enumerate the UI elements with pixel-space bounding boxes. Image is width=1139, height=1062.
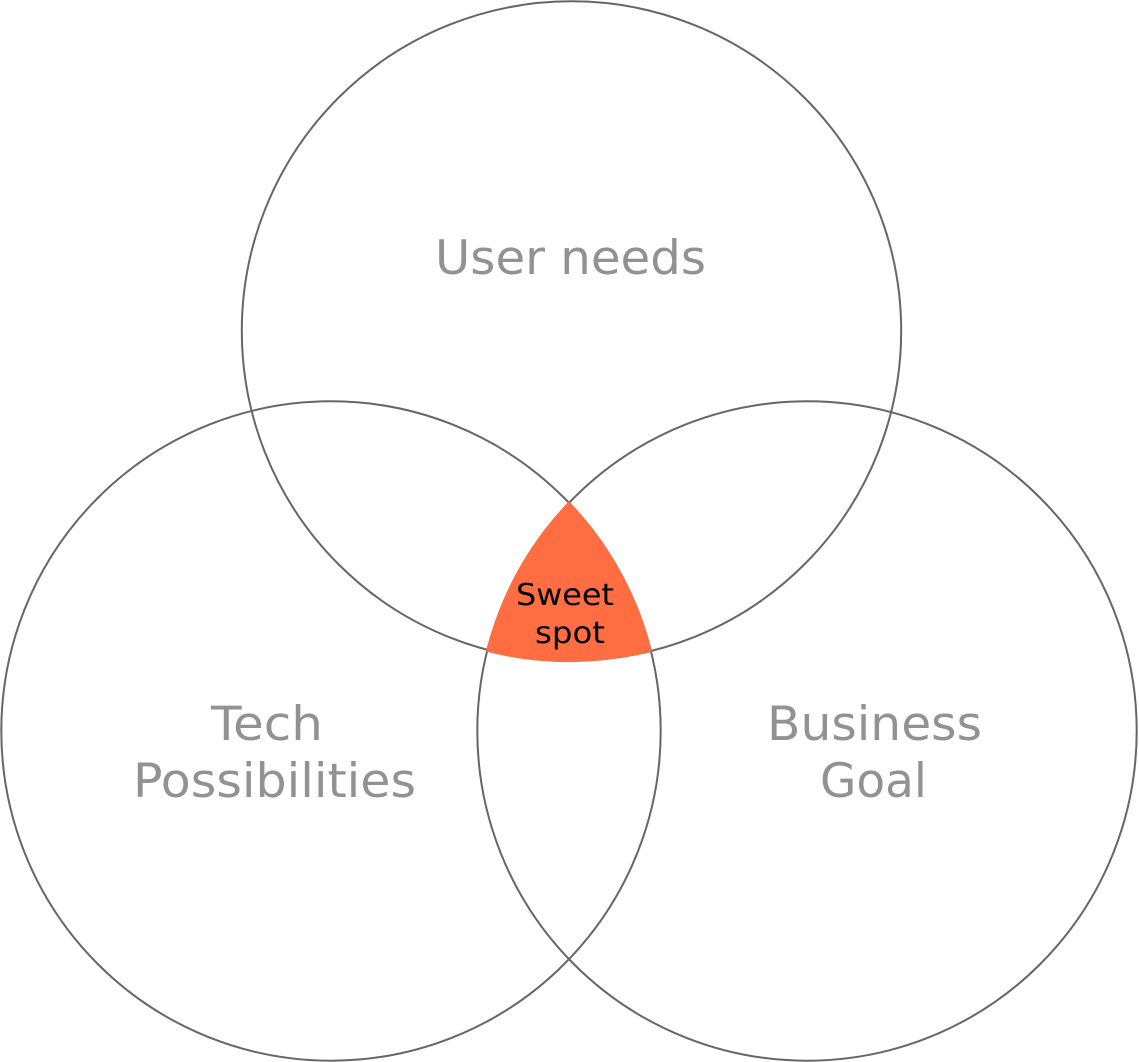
label: business goal [767,697,982,809]
label: sweet spot: spot [535,616,605,651]
circle: tech possibilities [1,401,661,1061]
label: sweet spot [516,578,614,651]
label: user needs: User needs [435,231,706,286]
label: tech possibilities: Tech [210,697,323,752]
label: tech possibilities [133,697,416,809]
label: business goal: Goal [820,754,927,809]
label: sweet spot: Sweet [516,578,614,613]
circle: user needs [242,1,901,661]
circle: business goal [477,401,1137,1061]
sweet spot intersection [487,502,651,661]
label: tech possibilities: Possibilities [133,754,416,809]
label: business goal: Business [767,697,982,752]
